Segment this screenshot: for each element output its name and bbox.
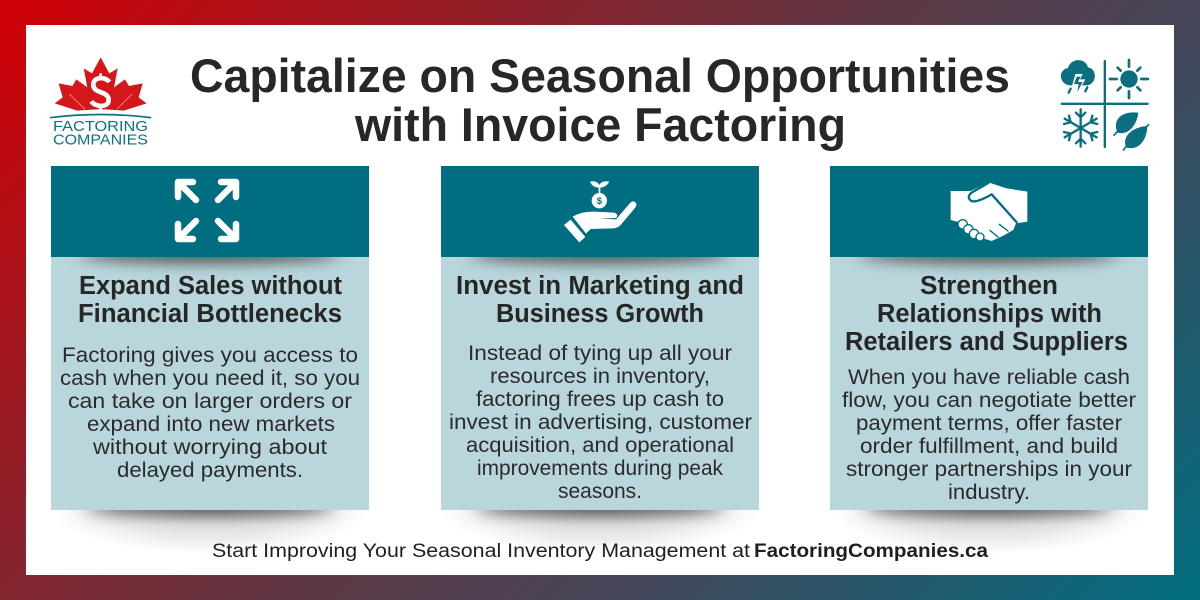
body text: invest in marketing: acquisition, and operational [466,433,734,457]
title: Capitalize on Seasonal Opportunities [190,49,1010,102]
icon: hand with coin and sprout [564,181,636,242]
body text: expand sales: expand into new markets [87,412,335,436]
icon: expand arrows [178,182,236,239]
panel: strengthen relationships [830,166,1148,510]
logo: Factoring Companies [50,57,151,148]
body text: expand sales [60,343,360,482]
body text: invest in marketing: factoring frees up cash to [476,387,724,411]
body text: strengthen relationships: order fulfillment, and build [860,434,1118,458]
body text: expand sales: cash when you need it, so you [60,366,360,390]
body text: strengthen relationships: When you have reliable cash [848,365,1130,389]
body text: strengthen relationships: payment terms, offer faster [856,411,1122,435]
body text: invest in marketing [449,341,752,503]
body text: strengthen relationships [842,365,1136,504]
body text: expand sales: can take on larger orders or [68,389,352,413]
body text: invest in marketing: invest in advertising, customer [449,410,752,434]
heading: expand sales: Expand Sales without [79,272,343,300]
body text: strengthen relationships: stronger partnerships in your [846,457,1132,481]
body text: expand sales: Factoring gives you access to [62,343,358,367]
body text: invest in marketing: improvements during peak [477,456,723,480]
body text: expand sales: without worrying about [92,435,327,459]
heading: expand sales [78,272,343,328]
panel: expand sales [51,166,369,510]
heading: invest in marketing: Business Growth [496,300,704,328]
footer call to action: Start Improving Your Seasonal Inventory Management at [212,541,751,562]
body text: invest in marketing: seasons. [558,479,642,503]
title [190,49,1010,151]
footer call to action: FactoringCompanies.ca [754,541,988,562]
heading: strengthen relationships [845,272,1128,356]
body text: expand sales: delayed payments. [117,458,303,482]
icon: handshake [951,182,1027,241]
logo: Factoring Companies: COMPANIES [53,132,148,148]
heading: strengthen relationships: Strengthen [920,272,1058,300]
body text: strengthen relationships: industry. [948,480,1030,504]
heading: invest in marketing [456,272,744,328]
icon: hand with coin and sprout: $ [597,196,603,206]
footer call to action [212,541,988,562]
panel: invest in marketing [441,166,759,510]
logo: Factoring Companies: FACTORING [53,119,148,135]
body text: invest in marketing: Instead of tying up all your [468,341,732,365]
icon: four seasons [1061,60,1149,150]
body text: strengthen relationships: flow, you can negotiate better [842,388,1136,412]
heading: strengthen relationships: Relationships with [877,300,1102,328]
heading: expand sales: Financial Bottlenecks [78,300,342,328]
heading: invest in marketing: Invest in Marketing and [456,272,744,300]
body text: invest in marketing: resources in inventory, [490,364,710,388]
title: with Invoice Factoring [354,98,846,151]
heading: strengthen relationships: Retailers and Suppliers [845,328,1128,356]
